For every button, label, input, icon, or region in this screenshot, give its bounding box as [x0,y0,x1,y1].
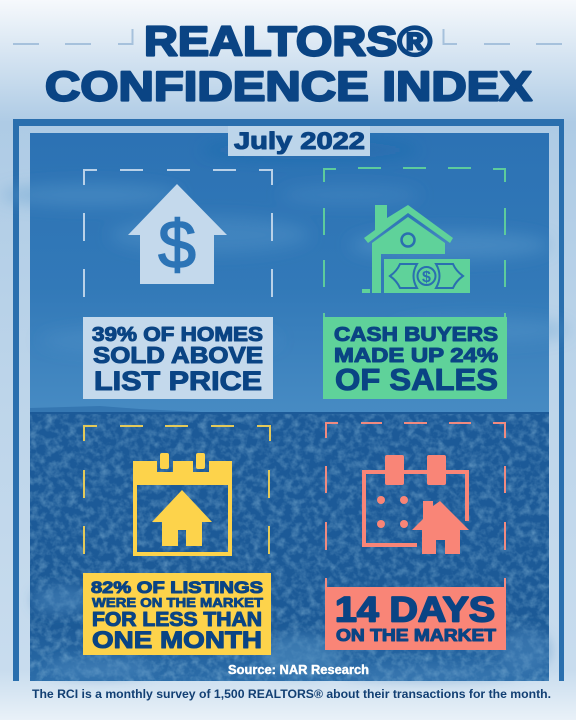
panel 3 dashed frame [84,426,270,554]
source note: Source: NAR Research [228,663,369,677]
panel 4 text box: 14 DAYS [335,590,495,630]
date label [228,126,370,156]
panel: homes sold above list price [83,170,273,399]
panel 3 text box: FOR LESS THAN [92,609,262,631]
panel 3 text box: ONE MONTH [92,627,262,654]
title dashes [13,29,562,44]
icon: calendar with dots and house [364,455,469,554]
date label: July 2022 [234,128,365,155]
panel 1 text box [83,317,273,399]
icon: house with cash: $ [422,269,431,286]
outer frame [13,119,564,681]
panel: listings on market [83,426,271,655]
panel 3 text box [83,573,271,655]
icon: house with dollar sign [128,184,227,284]
panel 2 dashed frame [324,168,505,318]
icon: calendar with house [133,453,232,556]
panel 1 text box: LIST PRICE [94,366,262,396]
footer note: The RCI is a monthly survey of 1,500 REALTORS® about their transactions for the month. [32,689,551,701]
panel: days on market [325,423,506,650]
panel 1 text box: 39% OF HOMES [92,324,263,346]
panel 4 dashed frame [326,423,505,587]
panel 1 dashed frame [84,170,272,297]
panel 4 text box: ON THE MARKET [336,625,496,645]
title: REALTORS® [144,18,432,64]
title [45,18,532,110]
icon: house with cash [362,205,470,293]
title: CONFIDENCE INDEX [45,62,532,110]
background photo [0,133,570,681]
panel 2 text box: OF SALES [335,362,498,397]
panel 1 text box: SOLD ABOVE [93,342,263,368]
panel 2 text box [323,317,507,399]
panel 2 text box: CASH BUYERS [334,324,498,346]
panel: cash buyers [323,168,507,399]
panel 3 text box: WERE ON THE MARKET [92,595,263,610]
panel 3 text box: 82% OF LISTINGS [91,578,263,597]
panel 4 text box [325,587,506,650]
icon: house with dollar sign: $ [158,207,196,283]
panel 2 text box: MADE UP 24% [334,345,498,367]
